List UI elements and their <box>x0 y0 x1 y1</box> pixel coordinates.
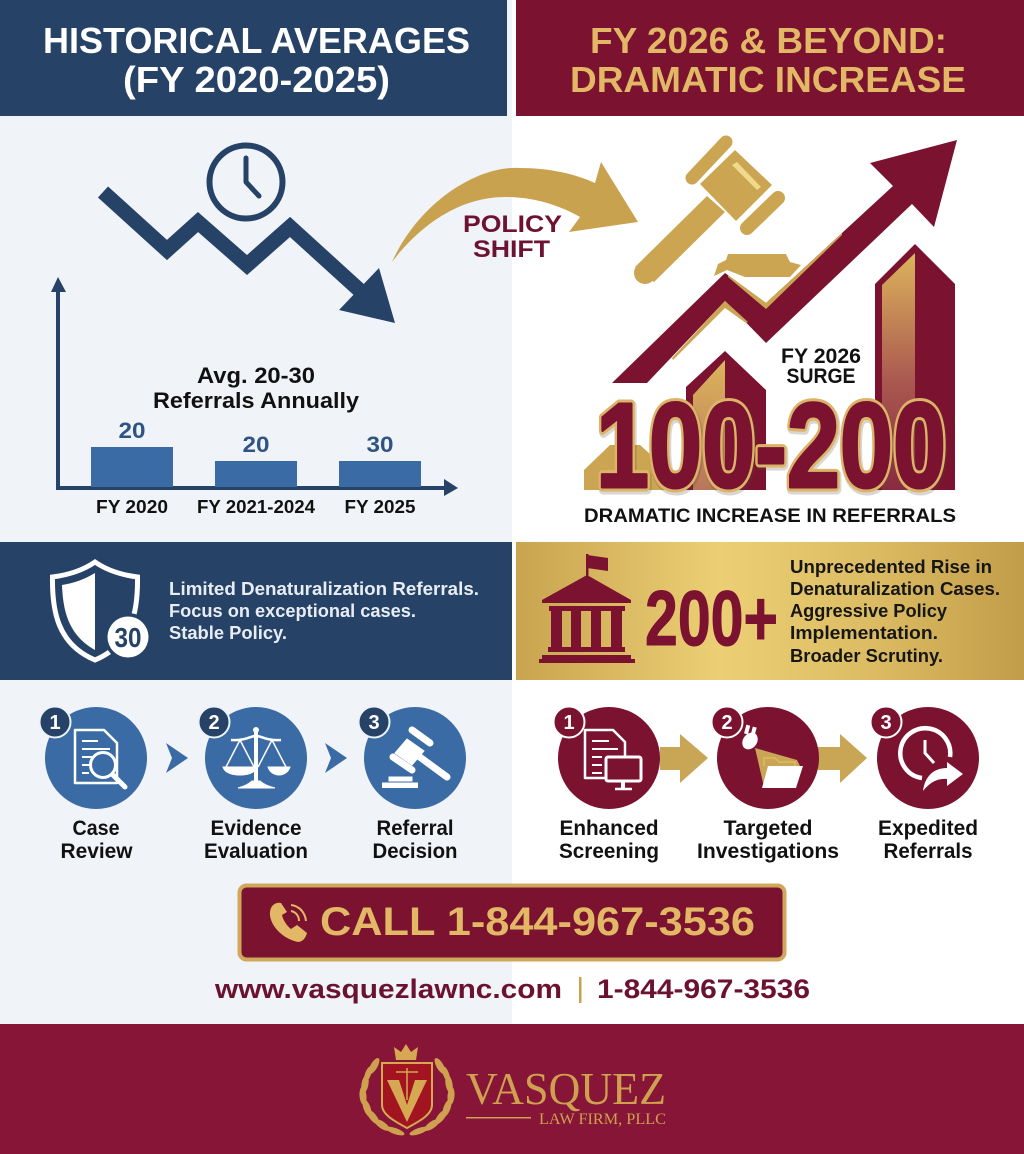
bar: FY 2025: 30 <box>366 432 394 457</box>
chart caption <box>153 363 360 413</box>
badge: 3 <box>358 706 390 738</box>
label: case review: Case <box>72 817 120 840</box>
label: evidence evaluation: Evaluation <box>204 840 308 863</box>
background: left panel <box>0 0 512 1024</box>
chart caption: Avg. 20-30 <box>197 363 315 388</box>
label: targeted investigations: Investigations <box>697 840 839 863</box>
icon: document with magnifier <box>75 730 125 787</box>
label: expedited referrals: Referrals <box>884 840 972 863</box>
footer band <box>0 1024 1024 1154</box>
logo: wordmark: LAW FIRM, PLLC <box>539 1111 666 1128</box>
icon: laurel right <box>409 1056 455 1137</box>
arrow: gold step 2 to 3 <box>818 734 867 783</box>
bar: FY 2021-2024: 20 <box>242 432 270 457</box>
text: limited referrals description <box>169 578 479 643</box>
arrow: gold step 1 to 2 <box>660 734 708 783</box>
label: evidence evaluation: Evidence <box>210 817 302 840</box>
badge: 2: 2 <box>208 712 220 734</box>
header: historical averages: (FY 2020-2025) <box>123 59 390 100</box>
header: FY 2026 and beyond: DRAMATIC INCREASE <box>570 59 966 100</box>
text: surge description: Implementation. <box>790 622 938 643</box>
badge: 3 <box>870 706 902 738</box>
bar: middle maroon <box>686 351 766 490</box>
arrow: chevron step 1 to 2 <box>166 743 188 773</box>
icon: phone <box>270 903 307 942</box>
contact line: 1-844-967-3536 <box>597 974 810 1004</box>
icon: white gavel <box>382 730 447 788</box>
background: right panel <box>512 0 1024 1024</box>
bar: FY 2020 <box>91 418 173 517</box>
label: policy shift <box>463 211 562 263</box>
step: case review <box>40 706 147 863</box>
badge: 3: 3 <box>368 712 380 734</box>
bar: FY 2021-2024 <box>197 432 315 517</box>
panel: 200+ band <box>516 542 1024 680</box>
step: referral decision <box>358 706 466 863</box>
logo: wordmark: VASQUEZ <box>466 1063 666 1114</box>
label: enhanced screening: Screening <box>559 840 659 863</box>
contact line <box>214 974 810 1004</box>
icon: gold gavel <box>634 142 801 284</box>
step: enhanced screening <box>554 706 660 863</box>
icon: laurel left <box>359 1056 405 1137</box>
stat: 200+: 200+ <box>645 574 778 662</box>
call to action button <box>240 886 784 960</box>
text: surge description: Broader Scrutiny. <box>790 645 943 666</box>
panel: limited referrals band <box>0 542 512 680</box>
bar: FY 2020: 20 <box>118 418 146 443</box>
label: expedited referrals <box>878 817 978 863</box>
label: referral decision: Decision <box>372 840 458 863</box>
icon: shield with 30 badge <box>52 562 152 661</box>
badge: 1: 1 <box>49 712 61 734</box>
label: referral decision <box>372 817 458 863</box>
badge: 3: 3 <box>880 712 892 734</box>
label: policy shift: SHIFT <box>473 236 550 263</box>
header: FY 2026 and beyond: FY 2026 & BEYOND: <box>590 20 947 61</box>
text: limited referrals description: Limited Denaturalization Referrals. <box>169 578 479 599</box>
label: case review: Review <box>60 840 133 863</box>
icon: document and monitor <box>585 730 641 789</box>
label: FY 2026 surge <box>781 345 861 388</box>
arrow: policy shift curve <box>392 162 638 262</box>
label: enhanced screening <box>559 817 659 863</box>
label: targeted investigations: Targeted <box>724 817 812 840</box>
text: surge description: Unprecedented Rise in <box>790 556 992 577</box>
header: FY 2026 and beyond <box>516 0 1024 116</box>
chart caption: Referrals Annually <box>153 388 360 413</box>
icon: scales of justice <box>223 728 290 788</box>
label: case review <box>60 817 133 863</box>
arrow: chevron step 2 to 3 <box>325 743 347 773</box>
bar: FY 2025 <box>339 432 421 517</box>
arrow: rising trend <box>612 140 957 383</box>
step: expedited referrals <box>870 706 979 863</box>
chart axes <box>51 277 458 496</box>
label: expedited referrals: Expedited <box>878 817 978 840</box>
text: limited referrals description: Stable Policy. <box>169 622 287 643</box>
text: call number: CALL 1-844-967-3536 <box>320 900 755 944</box>
contact line: www.vasquezlawnc.com <box>214 974 562 1004</box>
icon: shield <box>382 1063 432 1128</box>
icon: clock with arrow <box>900 728 963 791</box>
text: limited referrals description: Focus on exceptional cases. <box>169 600 416 621</box>
badge: 1 <box>554 706 584 738</box>
icon: spotlight on folder <box>739 725 803 788</box>
label: policy shift: POLICY <box>463 211 562 238</box>
label: FY 2026 surge: SURGE <box>786 365 856 388</box>
badge: 1 <box>40 706 70 738</box>
bar: FY 2025: FY 2025 <box>344 497 416 517</box>
arrow: declining trend <box>103 192 395 323</box>
logo: crest <box>359 1044 455 1137</box>
label: targeted investigations <box>697 817 839 863</box>
badge: 1: 1 <box>563 712 575 734</box>
text: surge description: Denaturalization Cases. <box>790 578 1000 599</box>
badge: 2 <box>712 706 742 738</box>
icon: government building <box>539 554 635 663</box>
badge: 2: 2 <box>721 712 733 734</box>
bar: tall maroon <box>875 244 955 490</box>
label: referral decision: Referral <box>376 817 454 840</box>
text: surge description <box>790 556 1000 666</box>
badge: 2 <box>198 706 230 738</box>
label: evidence evaluation <box>204 817 308 863</box>
bar: small gold stair <box>584 445 690 490</box>
label: FY 2026 surge: FY 2026 <box>781 345 861 368</box>
bar: FY 2021-2024: FY 2021-2024 <box>197 497 315 517</box>
header: historical averages <box>0 0 507 116</box>
icon: crown <box>394 1044 418 1060</box>
step: evidence evaluation <box>198 706 308 863</box>
label: enhanced screening: Enhanced <box>560 817 658 840</box>
step: targeted investigations <box>697 706 839 863</box>
header: historical averages: HISTORICAL AVERAGES <box>43 20 470 61</box>
text: surge description: Aggressive Policy <box>790 600 948 621</box>
bar chart: historical referrals <box>51 277 458 517</box>
caption: dramatic increase in referrals: DRAMATIC INCREASE IN REFERRALS <box>584 506 956 527</box>
icon: clock <box>210 146 282 218</box>
bar: FY 2020: FY 2020 <box>96 497 168 517</box>
icon: shield with 30 badge: 30 <box>114 622 142 653</box>
